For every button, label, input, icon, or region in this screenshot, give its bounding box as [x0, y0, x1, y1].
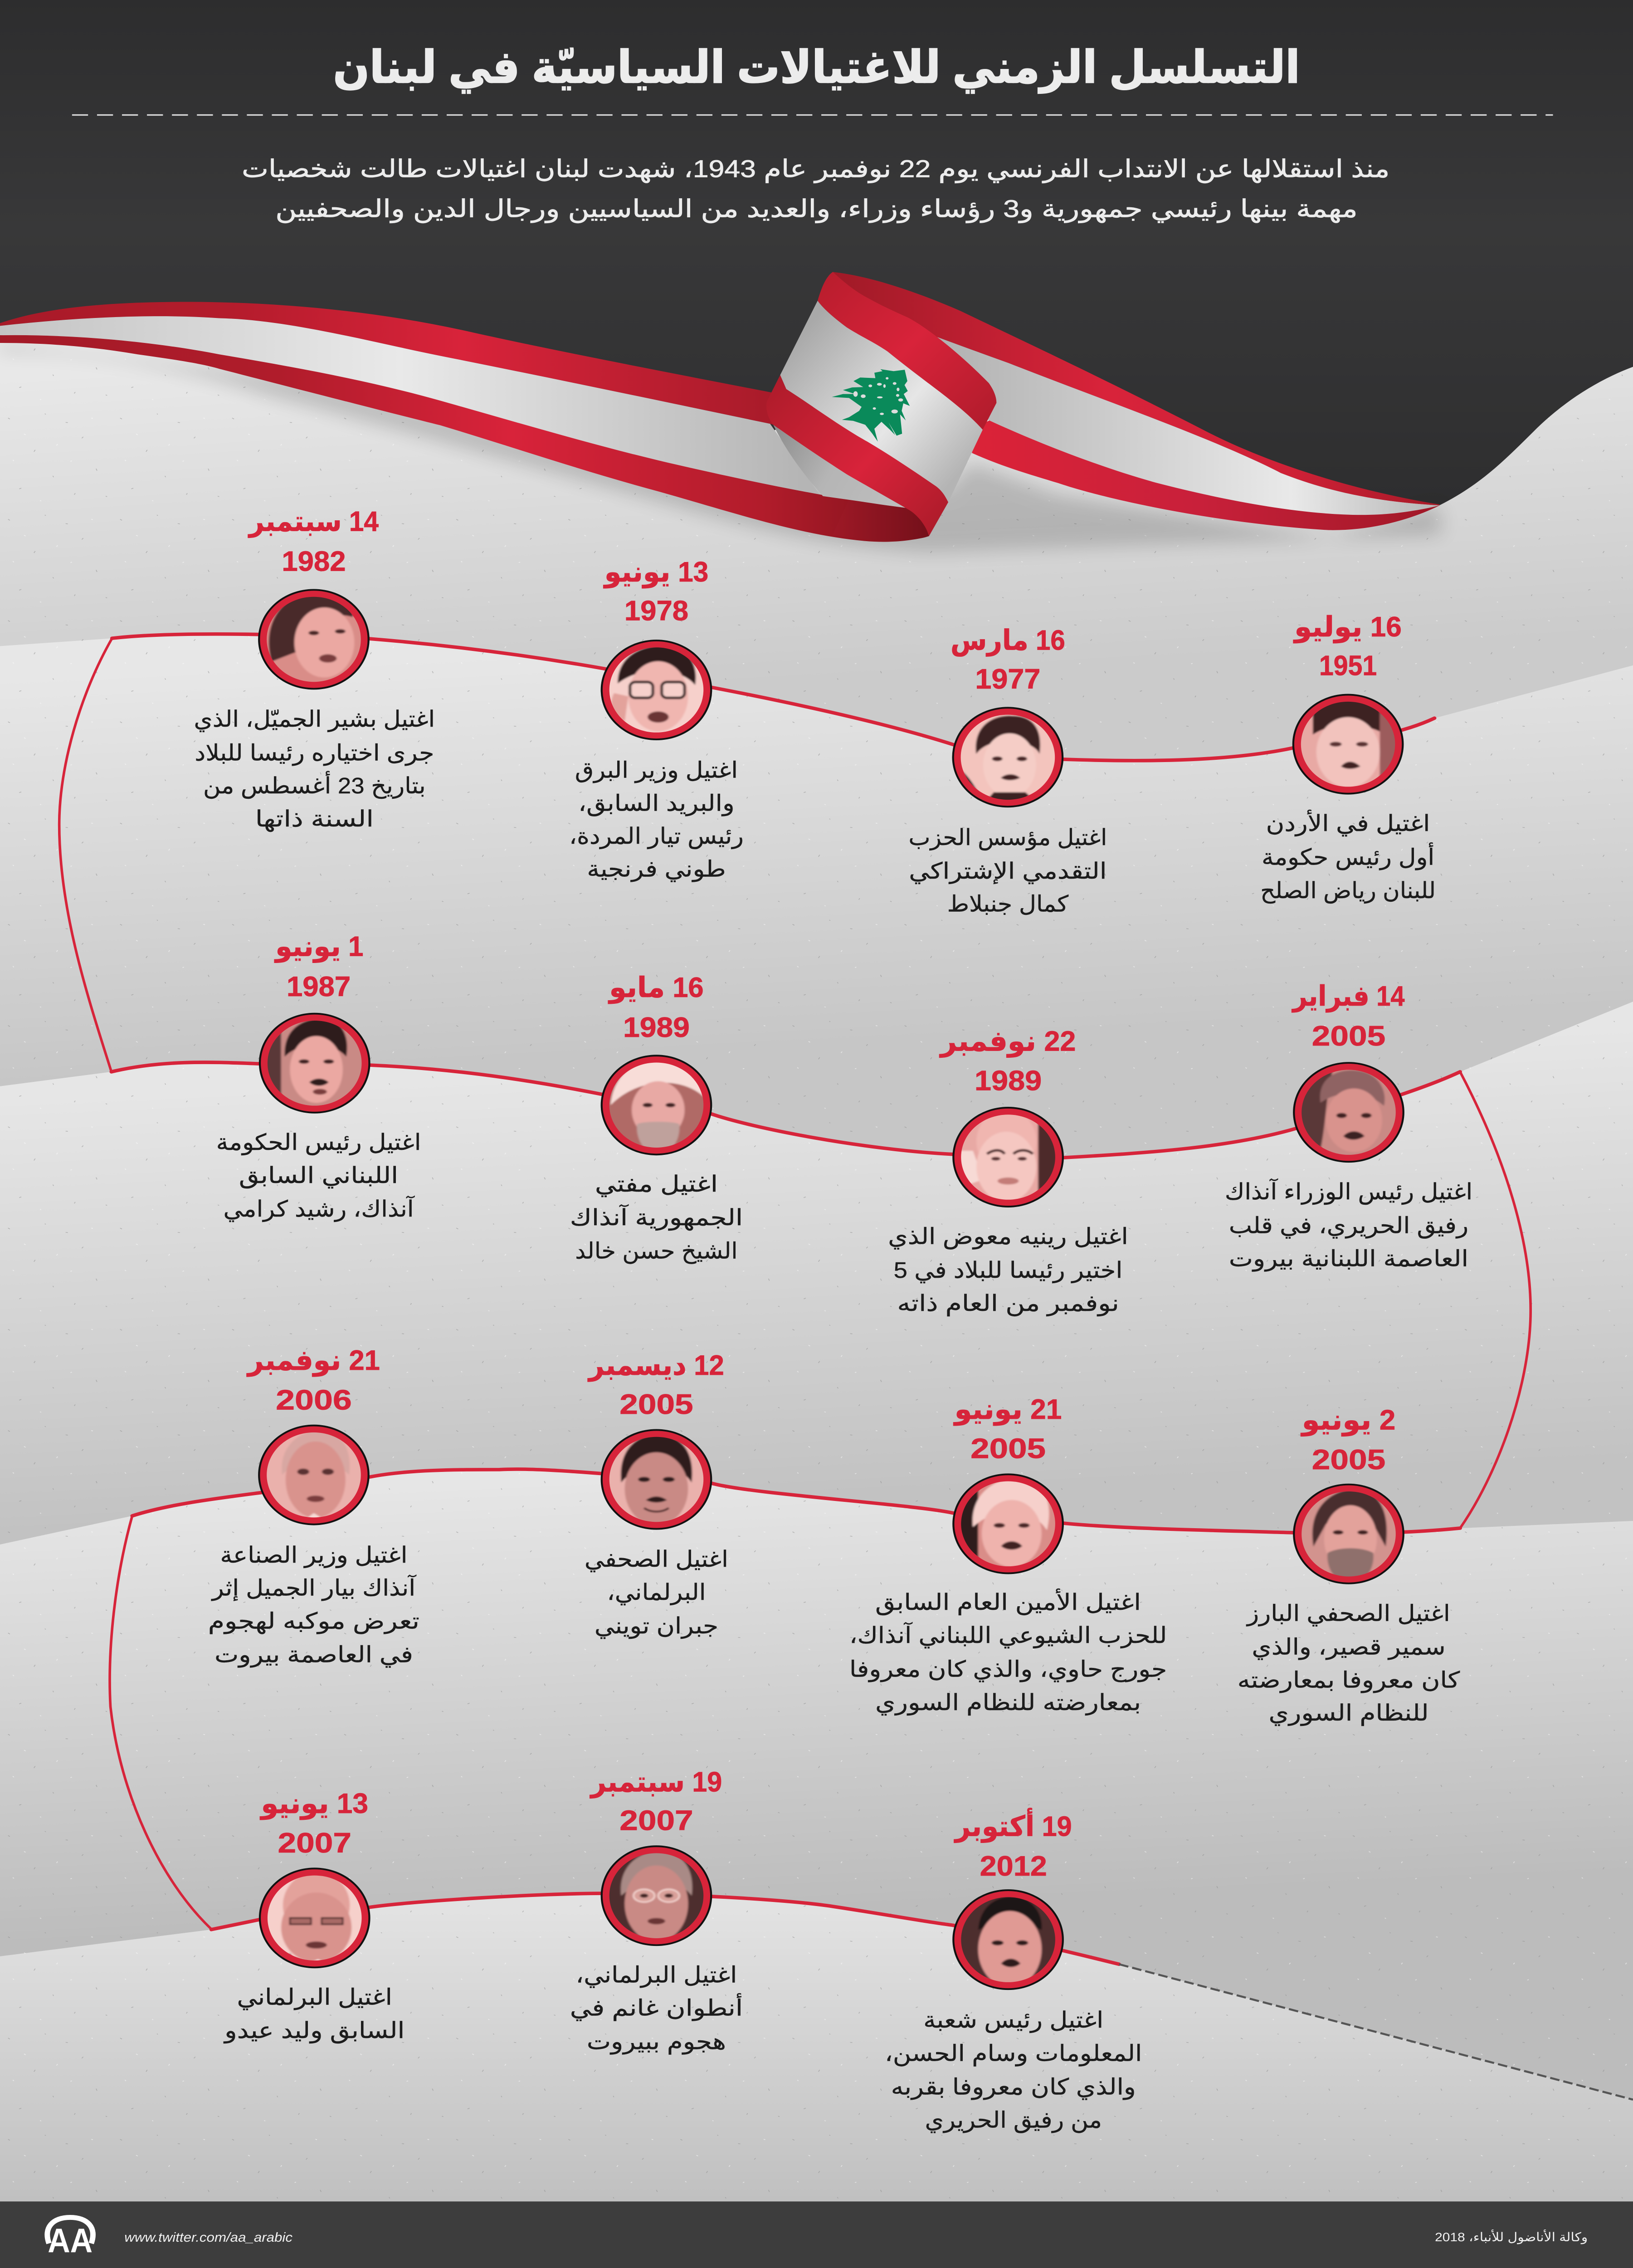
description — [849, 1589, 1167, 1716]
intro paragraph: منذ استقلالها عن الانتداب الفرنسي يوم 22 نوفمبر عام 1943، شهدت لبنان اغتيالات طالت شخصيات — [242, 155, 1389, 183]
event: Rashid Karami 1987 — [216, 931, 421, 1222]
description — [223, 1985, 405, 2043]
date — [608, 972, 704, 1043]
date: 2007 — [278, 1827, 351, 1858]
description: اغتيل الصحفي — [585, 1547, 728, 1572]
portrait — [952, 1473, 1064, 1574]
date: 2007 — [619, 1805, 693, 1836]
date: 2005 — [1312, 1020, 1385, 1051]
portrait — [259, 1867, 370, 1969]
description: اغتيل البرلماني، — [576, 1963, 737, 1988]
description: كان معروفا بمعارضته — [1238, 1668, 1460, 1693]
description: اغتيل وزير الصناعة — [220, 1543, 407, 1568]
page background: light band 1 — [0, 332, 1633, 767]
ribbon right: white — [916, 329, 1439, 515]
description — [1260, 810, 1436, 904]
description: اغتيل وزير البرق — [575, 758, 738, 783]
description: آنذاك بيار الجميل إثر — [211, 1574, 417, 1601]
description: اغتيل رينيه معوض الذي — [888, 1224, 1128, 1250]
description: الشيخ حسن خالد — [575, 1239, 738, 1264]
ribbon right: lower red — [960, 420, 1440, 530]
icon: cedar tree — [832, 369, 910, 442]
description: طوني فرنجية — [587, 857, 726, 882]
date — [951, 625, 1065, 694]
event: Rafik Hariri 2005 — [1225, 980, 1472, 1272]
date: 22 نوفمبر — [939, 1025, 1076, 1057]
description: اغتيل مؤسس الحزب — [908, 826, 1107, 851]
date: 13 يونيو — [603, 556, 708, 588]
portrait — [952, 1889, 1064, 1990]
ribbon front: top red — [818, 272, 996, 430]
description: والذي كان معروفا بقربه — [891, 2075, 1136, 2100]
description — [570, 1172, 743, 1264]
date: 13 يونيو — [260, 1788, 368, 1820]
event: Pierre Gemayel 2006 — [208, 1344, 419, 1668]
description: جورج حاوي، والذي كان معروفا — [849, 1657, 1167, 1682]
icon: AA logo: AA — [48, 2221, 93, 2259]
intro paragraph: مهمة بينها رئيسي جمهورية و3 رؤساء وزراء، والعديد من السياسيين ورجال الدين والصحفيين — [275, 195, 1358, 223]
description: أول رئيس حكومة — [1262, 842, 1434, 870]
ribbon front: white — [780, 301, 983, 502]
description — [570, 1963, 743, 2055]
portrait — [952, 1107, 1064, 1213]
ribbon left: lower red — [0, 335, 929, 542]
description: التقدمي الإشتراكي — [909, 859, 1107, 884]
portrait — [1293, 1062, 1404, 1163]
ribbon left: top red — [0, 302, 785, 428]
date: 2005 — [1312, 1444, 1385, 1475]
description: اغتيل البرلماني — [237, 1985, 392, 2010]
ribbon left: white — [0, 316, 908, 508]
date: 16 يوليو — [1293, 611, 1402, 643]
date — [954, 1808, 1072, 1882]
description: كمال جنبلاط — [947, 892, 1068, 917]
description: أنطوان غانم في — [570, 1993, 743, 2021]
description: جبران تويني — [595, 1613, 718, 1639]
description: للنظام السوري — [1268, 1701, 1429, 1726]
description: اغتيل مفتي — [595, 1172, 718, 1197]
date — [587, 1349, 724, 1420]
date: 1982 — [282, 545, 346, 577]
description — [585, 1547, 728, 1639]
date — [248, 505, 379, 577]
footer link: www.twitter.com/aa_arabic — [124, 2230, 292, 2245]
description: في العاصمة بيروت — [214, 1642, 413, 1668]
description — [216, 1130, 421, 1222]
event: Tony Frangieh 1978 — [569, 556, 744, 882]
date: 21 نوفمبر — [246, 1344, 380, 1377]
portrait — [259, 1013, 370, 1114]
dashed continuation line — [1119, 1964, 1633, 2100]
description: آنذاك، رشيد كرامي — [223, 1195, 415, 1222]
portrait — [601, 1429, 712, 1530]
date: 19 سبتمبر — [590, 1766, 722, 1798]
date — [1292, 980, 1405, 1051]
date: 1989 — [623, 1012, 690, 1043]
description: بتاريخ 23 أغسطس من — [203, 771, 426, 799]
event: George Hawi 2005 — [849, 1393, 1167, 1716]
description: اختير رئيسا للبلاد في 5 — [894, 1258, 1123, 1283]
description: رفيق الحريري، في قلب — [1229, 1213, 1468, 1239]
ribbon right: top red — [833, 272, 1440, 505]
description: بمعارضته للنظام السوري — [875, 1690, 1141, 1716]
date — [1301, 1404, 1395, 1475]
title: التسلسل الزمني للاغتيالات السياسيّة في لبنان — [333, 43, 1300, 93]
date: 2006 — [276, 1384, 352, 1416]
description: للبنان رياض الصلح — [1260, 878, 1436, 904]
date: 2 يونيو — [1301, 1404, 1395, 1437]
date — [246, 1344, 380, 1416]
date: 1951 — [1319, 650, 1377, 681]
date: 12 ديسمبر — [587, 1349, 724, 1382]
description — [194, 707, 435, 832]
description: اغتيل رئيس شعبة — [923, 2008, 1103, 2033]
description: المعلومات وسام الحسن، — [885, 2041, 1142, 2067]
event: Walid Eido 2007 — [223, 1788, 405, 2043]
date: 14 سبتمبر — [248, 505, 379, 538]
description: العاصمة اللبنانية بيروت — [1229, 1246, 1468, 1272]
date: 1987 — [287, 971, 351, 1002]
timeline path — [59, 634, 1531, 1964]
footer bar — [0, 2201, 1633, 2268]
date: 14 فبراير — [1292, 980, 1405, 1012]
description: اغتيل الصحفي البارز — [1246, 1601, 1450, 1627]
description — [208, 1543, 419, 1668]
header dark panel — [0, 0, 1633, 505]
description — [908, 826, 1107, 917]
description: اغتيل الأمين العام السابق — [875, 1589, 1141, 1615]
portrait — [1292, 693, 1404, 795]
date: 19 أكتوبر — [954, 1808, 1072, 1843]
description: اغتيل رئيس الحكومة — [216, 1130, 421, 1155]
description — [885, 2008, 1142, 2133]
background band 2 — [0, 634, 1633, 1157]
date: 16 مايو — [608, 972, 704, 1004]
description: هجوم ببيروت — [587, 2029, 726, 2055]
description: تعرض موكبه لهجوم — [208, 1609, 419, 1634]
portrait — [1293, 1484, 1404, 1585]
footer credit: وكالة الأناضول للأنباء، 2018 — [1435, 2229, 1588, 2244]
date: 2005 — [970, 1432, 1046, 1464]
date — [953, 1393, 1062, 1464]
date: 1989 — [975, 1065, 1042, 1096]
description: والبريد السابق، — [578, 791, 735, 816]
description: سمير قصير، والذي — [1252, 1635, 1446, 1660]
event: Antoine Ghanem 2007 — [570, 1766, 743, 2055]
date: 1977 — [975, 663, 1040, 694]
date: 21 يونيو — [953, 1393, 1062, 1426]
description: جرى اختياره رئيسا للبلاد — [195, 741, 434, 766]
background band 4 — [0, 1469, 1633, 2213]
description — [569, 758, 744, 882]
description: اغتيل رئيس الوزراء آنذاك — [1225, 1178, 1472, 1205]
description: السابق وليد عيدو — [223, 2018, 405, 2043]
description: للحزب الشيوعي اللبناني آنذاك، — [849, 1622, 1167, 1648]
description: نوفمبر من العام ذاته — [897, 1291, 1119, 1316]
description: البرلماني، — [607, 1580, 706, 1605]
description: اغتيل في الأردن — [1266, 810, 1430, 836]
ribbon fold: grey inner — [773, 425, 908, 508]
event: Hassan Khaled 1989 — [570, 972, 743, 1264]
description — [888, 1224, 1128, 1316]
description: السنة ذاتها — [255, 807, 374, 832]
ribbon: Lebanese flag — [0, 272, 1441, 552]
event: Riad al-Solh 1951 — [1260, 611, 1436, 904]
description: اللبناني السابق — [239, 1163, 398, 1188]
date — [603, 556, 708, 626]
event: Rene Moawad 1989 — [888, 1025, 1128, 1316]
portrait — [258, 1425, 370, 1526]
portrait — [258, 589, 370, 689]
date — [260, 1788, 368, 1858]
portrait — [952, 707, 1063, 808]
background band 3 — [0, 1002, 1633, 1591]
event: Samir Kassir 2005 — [1238, 1404, 1460, 1726]
date — [1293, 611, 1402, 681]
event: Wissam al-Hassan 2012 — [885, 1808, 1142, 2133]
description: الجمهورية آنذاك — [570, 1203, 743, 1231]
event: Gebran Tueni 2005 — [585, 1349, 728, 1639]
description: رئيس تيار المردة، — [569, 824, 744, 849]
event: Kamal Jumblatt 1977 — [908, 625, 1107, 917]
portrait — [601, 640, 712, 741]
description: من رفيق الحريري — [925, 2108, 1102, 2133]
date: 2005 — [619, 1388, 693, 1420]
date — [939, 1025, 1076, 1096]
intro paragraph — [242, 155, 1389, 223]
description: اغتيل بشير الجميّل، الذي — [194, 707, 435, 732]
date: 16 مارس — [951, 625, 1065, 657]
portrait — [601, 1055, 712, 1156]
ribbon fold: dark loop — [833, 500, 929, 540]
portrait — [601, 1845, 712, 1946]
event: Bachir Gemayel 1982 — [194, 505, 435, 832]
date — [590, 1766, 722, 1836]
background band 5 — [0, 1893, 1633, 2203]
ribbon front: lower red — [766, 375, 948, 536]
date: 1 يونيو — [274, 931, 363, 963]
date: 1978 — [624, 595, 688, 626]
description — [1238, 1601, 1460, 1726]
date — [274, 931, 363, 1002]
description — [1225, 1178, 1472, 1272]
date: 2012 — [980, 1850, 1047, 1882]
